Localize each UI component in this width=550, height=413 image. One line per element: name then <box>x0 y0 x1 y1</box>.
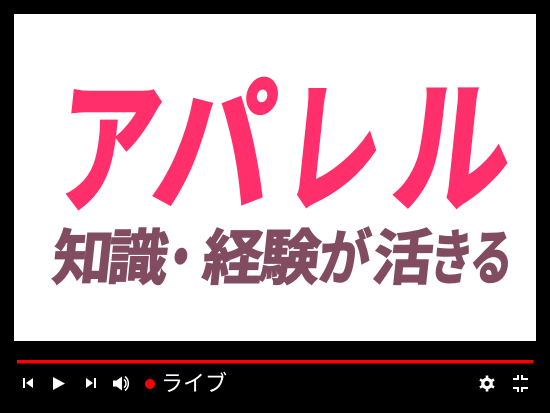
icon: volume <box>113 376 128 390</box>
subtitle: 経 <box>200 225 267 292</box>
subtitle: き <box>427 226 477 293</box>
icon: next <box>86 378 96 388</box>
progress bar <box>17 360 533 364</box>
subtitle: 知 <box>50 225 117 292</box>
main title: レ <box>276 70 390 232</box>
video screen panel <box>14 14 536 341</box>
main title: ル <box>387 69 519 231</box>
icon: play <box>53 377 65 390</box>
subtitle: 識 <box>105 225 172 292</box>
main title: ア <box>49 69 168 231</box>
icon: exit fullscreen <box>513 375 528 392</box>
subtitle: 験 <box>257 225 324 292</box>
subtitle: が <box>316 224 374 292</box>
subtitle <box>50 224 517 293</box>
live label: ライブ <box>161 371 227 396</box>
icon: previous <box>23 378 33 388</box>
main title <box>49 69 519 232</box>
main title: パ <box>147 70 281 232</box>
live indicator dot <box>145 379 155 389</box>
icon: settings gear <box>480 376 494 392</box>
subtitle: る <box>467 226 517 293</box>
subtitle: ・ <box>155 226 207 293</box>
subtitle: 活 <box>370 225 437 292</box>
